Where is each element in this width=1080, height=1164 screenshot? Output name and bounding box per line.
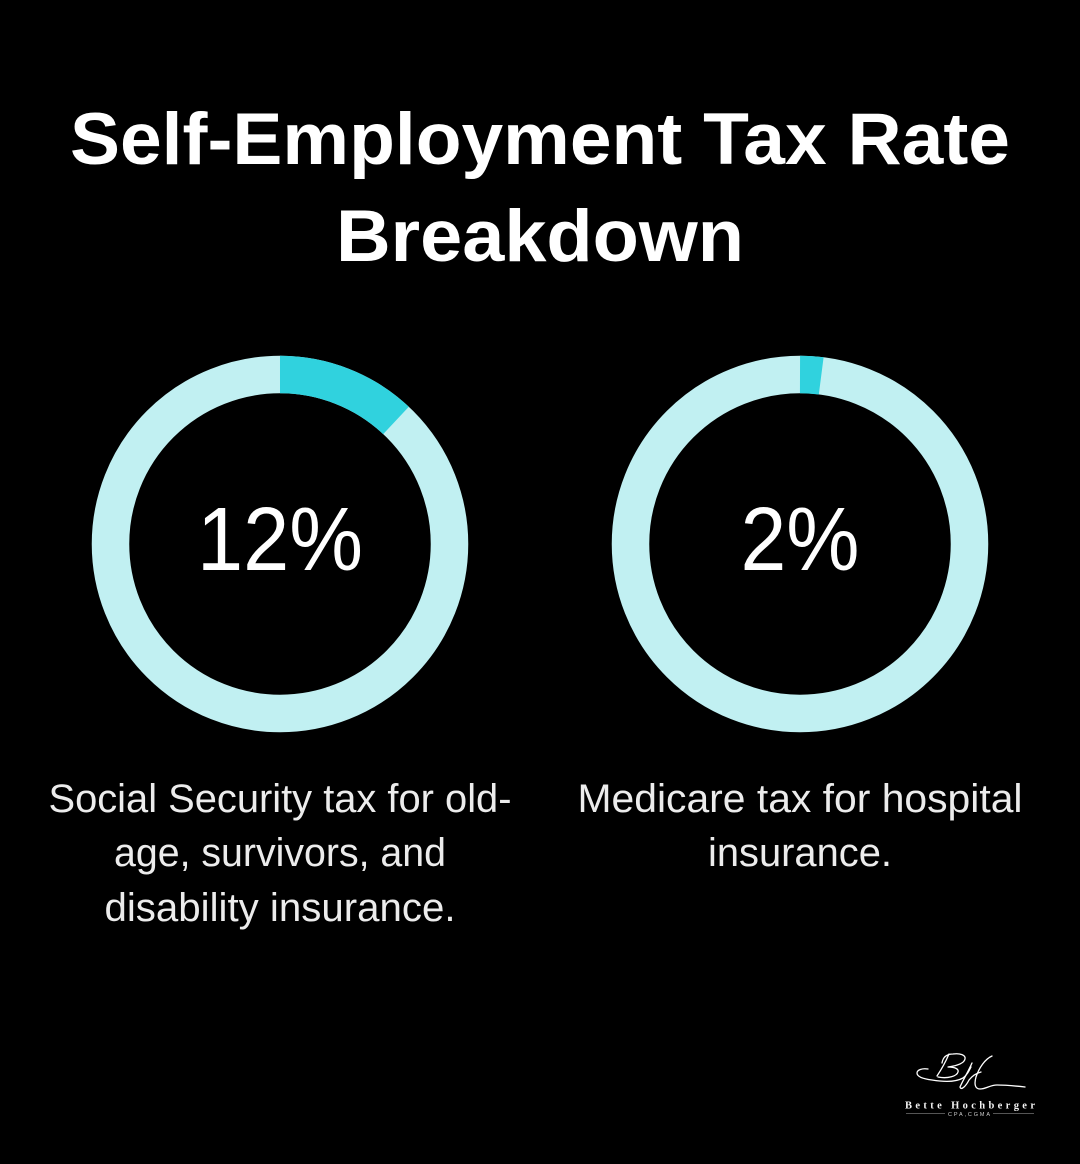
description: social security: Social Security tax for old- xyxy=(48,777,512,821)
title: Self-Employment Tax Rate xyxy=(70,99,1010,180)
description: social security: disability insurance. xyxy=(104,886,456,930)
donut chart: 2% xyxy=(630,374,970,714)
icon: signature xyxy=(917,1054,1025,1089)
donut chart: 12% xyxy=(110,374,450,714)
title xyxy=(70,99,1010,277)
description: medicare xyxy=(578,777,1022,875)
logo: Bette Hochberger xyxy=(905,1054,1035,1118)
panel: medicare xyxy=(578,374,1022,875)
value: 2%: 2% xyxy=(740,490,860,590)
title: Breakdown xyxy=(336,196,744,277)
panel: social security xyxy=(48,374,512,930)
description: medicare: Medicare tax for hospital xyxy=(578,777,1022,821)
value: 12%: 12% xyxy=(197,490,363,590)
description: social security: age, survivors, and xyxy=(114,831,446,875)
text: name: Bette Hochberger xyxy=(905,1100,1035,1112)
text: credentials: CPA,CGMA xyxy=(948,1112,990,1118)
description: medicare: insurance. xyxy=(708,831,892,875)
description: social security xyxy=(48,777,512,930)
